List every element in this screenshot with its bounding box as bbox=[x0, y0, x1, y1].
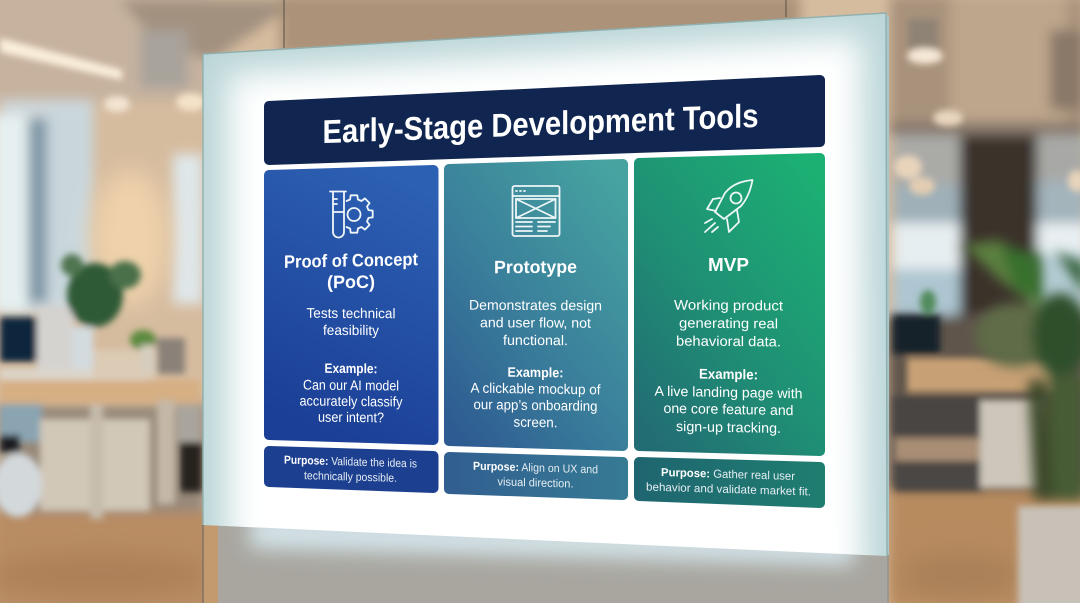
heading: Proof of Concept (PoC): Proof of Concept bbox=[284, 249, 418, 272]
description: Working product bbox=[674, 297, 783, 313]
example bbox=[470, 365, 601, 430]
example: Example: bbox=[508, 365, 563, 380]
example: sign-up tracking. bbox=[676, 418, 781, 436]
heading: Proof of Concept (PoC) bbox=[284, 249, 418, 292]
description: functional. bbox=[503, 332, 568, 348]
example bbox=[654, 366, 802, 436]
panel: Prototype bbox=[449, 164, 623, 446]
purpose box: PoC: Purpose: Validate the idea is bbox=[284, 455, 417, 471]
heading: Prototype: Prototype bbox=[494, 257, 577, 277]
example: screen. bbox=[514, 414, 558, 430]
purpose box: Prototype: visual direction. bbox=[498, 476, 574, 491]
description bbox=[674, 297, 783, 349]
description: Demonstrates design bbox=[469, 297, 602, 313]
example: Example: bbox=[699, 366, 758, 382]
icon: browser wireframe bbox=[512, 186, 560, 236]
description: behavioral data. bbox=[676, 333, 781, 349]
purpose box: MVP: Purpose: Gather real user bbox=[661, 467, 795, 483]
description: and user flow, not bbox=[480, 314, 591, 331]
heading: Proof of Concept (PoC): (PoC) bbox=[327, 272, 375, 292]
example: accurately classify bbox=[300, 392, 402, 410]
purpose box: PoC bbox=[269, 451, 434, 488]
example bbox=[300, 361, 402, 425]
title: Early-Stage Development Tools bbox=[322, 97, 758, 150]
hanging wires bbox=[284, 0, 786, 48]
description: generating real bbox=[679, 315, 778, 331]
glass sign board bbox=[203, 13, 889, 603]
icon: rocket bbox=[705, 180, 752, 232]
example: A clickable mockup of bbox=[470, 380, 601, 397]
purpose box: MVP: behavior and validate market fit. bbox=[646, 482, 811, 498]
purpose box: Prototype bbox=[449, 457, 623, 495]
description bbox=[306, 305, 396, 338]
example: Can our AI model bbox=[303, 377, 399, 393]
description: feasibility bbox=[323, 322, 379, 338]
purpose box: MVP bbox=[639, 462, 820, 503]
icon: test tube and gear bbox=[330, 192, 373, 238]
example: A live landing page with bbox=[654, 383, 802, 401]
purpose box: PoC: technically possible. bbox=[304, 470, 397, 485]
example: user intent? bbox=[318, 409, 384, 425]
heading: MVP: MVP bbox=[708, 255, 749, 275]
example: one core feature and bbox=[664, 400, 794, 418]
panel: MVP bbox=[639, 158, 820, 451]
description bbox=[469, 297, 602, 348]
panel: Proof of Concept bbox=[269, 170, 434, 440]
example: our app’s onboarding bbox=[474, 396, 597, 414]
example: Example: bbox=[324, 361, 378, 376]
title banner bbox=[269, 80, 820, 160]
description: Tests technical bbox=[306, 305, 396, 321]
glow reflection under the sign bbox=[202, 525, 889, 603]
purpose box: Prototype: Purpose: Align on UX and bbox=[473, 461, 598, 476]
